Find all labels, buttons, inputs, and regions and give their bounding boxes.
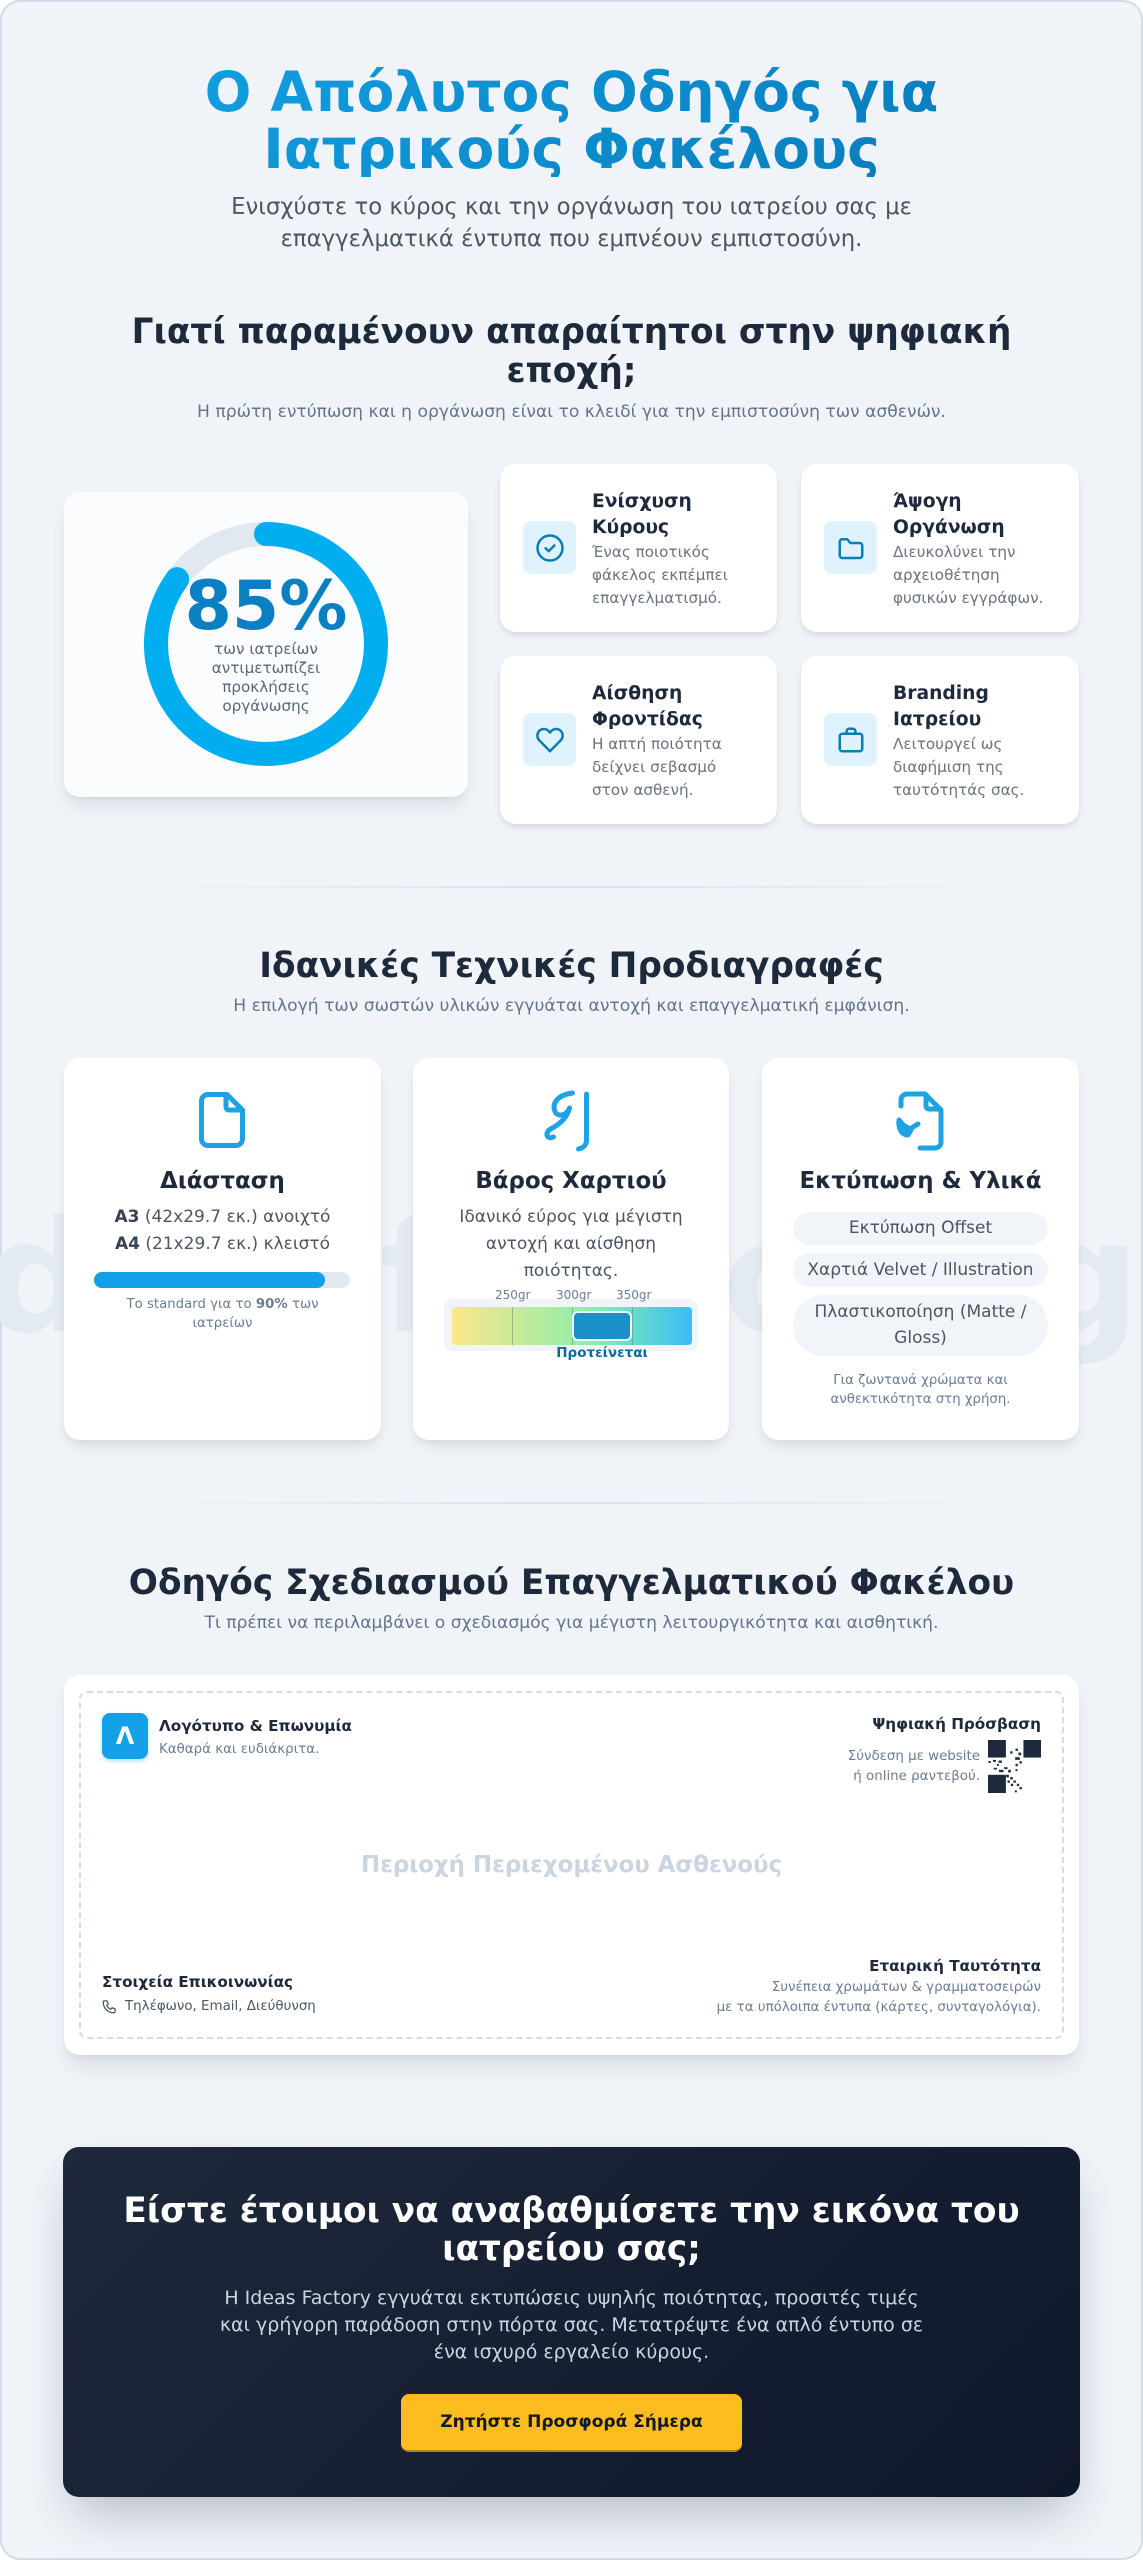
donut caption: οργάνωσης [222, 697, 310, 715]
digital access text [848, 1749, 980, 1784]
title: Ιατρικούς Φακέλους [263, 116, 880, 180]
panel: 85% statistic [64, 492, 468, 797]
card text [893, 683, 1024, 799]
heading: folder design guide: Οδηγός Σχεδιασμού Επαγγελματικού Φακέλου [129, 1563, 1014, 1603]
donut caption: προκλήσεις [222, 678, 310, 696]
card note: ανθεκτικότητα στη χρήση. [830, 1392, 1010, 1407]
panel: dimensions [64, 1058, 381, 1440]
contact info text: Τηλέφωνο, Email, Διεύθυνση [125, 1999, 316, 2014]
card text: Η απτή ποιότητα [592, 735, 722, 753]
card text: Ένας ποιοτικός [592, 543, 710, 561]
card: feeling of care [500, 656, 777, 824]
scale labels: 250gr [495, 1288, 530, 1302]
card text: Λειτουργεί ως [893, 735, 1002, 753]
bar caption: Το standard για το 90% των [126, 1297, 319, 1312]
recommended range [572, 1311, 632, 1341]
donut chart: 85% [144, 522, 388, 766]
scale labels: 350gr [616, 1288, 651, 1302]
contact info heading: Στοιχεία Επικοινωνίας [102, 1973, 293, 1991]
pill: paper [793, 1253, 1048, 1287]
card text: Άψογη [893, 491, 962, 512]
scale labels [495, 1288, 652, 1302]
dashed folder outline [79, 1691, 1064, 2039]
card description: αντοχή και αίσθηση [486, 1234, 656, 1254]
card: flawless organization [801, 464, 1079, 632]
card text: αρχειοθέτηση [893, 566, 1000, 584]
CTA button: Ζητήστε Προσφορά Σήμερα [440, 2412, 703, 2432]
heading: why they remain essential: εποχή; [506, 351, 637, 391]
card text: Ενίσχυση [592, 491, 692, 512]
card text: φάκελος εκπέμπει [592, 566, 728, 584]
scale track [444, 1299, 698, 1351]
card text [592, 491, 728, 607]
weight scale [444, 1288, 698, 1361]
panel: printing and materials [762, 1058, 1079, 1440]
panel: folder layout diagram [64, 1675, 1079, 2055]
section 2 subheading: Η επιλογή των σωστών υλικών εγγυάται αντοχή και επαγγελματική εμφάνιση. [233, 996, 910, 1016]
card text: επαγγελματισμό. [592, 589, 722, 607]
corporate identity heading: Εταιρική Ταυτότητα [869, 1957, 1041, 1975]
card description: Ιδανικό εύρος για μέγιστη [459, 1207, 683, 1227]
subtitle: επαγγελματικά έντυπα που εμπνέουν εμπιστοσύνη. [281, 226, 862, 252]
digital access text: Σύνδεση με website [848, 1749, 980, 1764]
CTA text: και γρήγορη παράδοση στην πόρτα σας. Μετατρέψτε ένα απλό έντυπο σε [220, 2314, 923, 2336]
donut caption [212, 640, 320, 715]
card text: Οργάνωση [893, 517, 1005, 538]
card description: ποιότητας. [524, 1261, 618, 1281]
card text: Branding [893, 683, 989, 704]
card: clinic branding [801, 656, 1079, 824]
CTA heading: Είστε έτοιμοι να αναβαθμίσετε την εικόνα του [123, 2191, 1020, 2231]
section 1 subheading: Η πρώτη εντύπωση και η οργάνωση είναι το κλειδί για την εμπιστοσύνη των ασθενών. [197, 402, 946, 422]
card text: διαφήμιση της [893, 758, 1004, 776]
title [64, 64, 1079, 177]
heading: why they remain essential: Γιατί παραμένουν απαραίτητοι στην ψηφιακή [132, 312, 1011, 352]
background watermark letters: g [1029, 1187, 1140, 1368]
card: enhancing prestige [500, 464, 777, 632]
progress bar 90% [94, 1272, 350, 1288]
corporate identity text [717, 1980, 1041, 2014]
corporate identity text: Συνέπεια χρωμάτων & γραμματοσειρών [772, 1980, 1041, 1995]
donut caption: των ιατρείων [214, 640, 318, 658]
CTA text [220, 2287, 923, 2363]
background watermark letters: f [380, 1187, 447, 1368]
card description [459, 1207, 683, 1281]
logo badge [102, 1713, 148, 1759]
center placeholder: Περιοχή Περιεχομένου Ασθενούς [361, 1852, 782, 1878]
pill: offset [793, 1212, 1048, 1245]
pill: offset: Εκτύπωση Offset [849, 1218, 992, 1238]
title: Ο Απόλυτος Οδηγός για [205, 60, 938, 124]
QR code [988, 1740, 1041, 1793]
bar caption: ιατρείων [193, 1316, 252, 1331]
logo badge: Λ [116, 1722, 134, 1750]
section 3 subheading: Τι πρέπει να περιλαμβάνει ο σχεδιασμός για μέγιστη λειτουργικότητα και αισθητική. [204, 1613, 938, 1633]
subtitle: Ενισχύστε το κύρος και την οργάνωση του ιατρείου σας με [231, 194, 912, 220]
pill: lamination: Πλαστικοποίηση (Matte / [814, 1302, 1026, 1322]
card text: ταυτότητάς σας. [893, 781, 1024, 799]
gradient bar [452, 1307, 692, 1345]
icon: phone [102, 2000, 116, 2014]
card title: Εκτύπωση & Υλικά [800, 1168, 1041, 1194]
digital access heading: Ψηφιακή Πρόσβαση [872, 1715, 1041, 1733]
icon: file check [896, 1092, 944, 1150]
heading: ideal technical specifications: Ιδανικές Τεχνικές Προδιαγραφές [259, 946, 884, 986]
CTA text: Η Ideas Factory εγγυάται εκτυπώσεις υψηλής ποιότητας, προσιτές τιμές [224, 2287, 919, 2309]
background watermark letters: o [722, 1187, 828, 1368]
card text: Φροντίδας [592, 709, 703, 730]
card text: Αίσθηση [592, 683, 682, 704]
card text: δείχνει σεβασμό [592, 758, 716, 776]
card text: Διευκολύνει την [893, 543, 1015, 561]
icon: check circle [523, 521, 576, 574]
bar caption [126, 1297, 319, 1331]
pill: paper: Χαρτιά Velvet / Illustration [807, 1260, 1034, 1280]
card text [592, 683, 722, 799]
CTA heading [123, 2191, 1020, 2269]
card text: στον ασθενή. [592, 781, 693, 799]
panel: paper weight [413, 1058, 729, 1440]
CTA text: ένα ισχυρό εργαλείο κύρους. [434, 2341, 709, 2363]
card note [830, 1373, 1010, 1407]
CTA heading: ιατρείου σας; [442, 2229, 701, 2269]
logo text: Λογότυπο & Επωνυμία [159, 1717, 352, 1735]
logo text [159, 1717, 352, 1757]
corporate identity text: με τα υπόλοιπα έντυπα (κάρτες, συνταγολόγια). [717, 2000, 1041, 2014]
big number 85%: 85% [185, 567, 347, 646]
pill: lamination: Gloss) [894, 1328, 947, 1348]
panel: call to action [63, 2147, 1080, 2497]
size lines: A3 (42x29.7 εκ.) ανοιχτό [115, 1207, 330, 1227]
size lines [114, 1207, 330, 1254]
card note: Για ζωντανά χρώματα και [833, 1373, 1008, 1388]
icon: briefcase [824, 713, 877, 766]
card text: Ιατρείου [893, 709, 981, 730]
digital access text: ή online ραντεβού. [853, 1768, 980, 1784]
logo text: Καθαρά και ευδιάκριτα. [159, 1742, 319, 1757]
icon: scale glyph [544, 1090, 589, 1152]
card title: Βάρος Χαρτιού [475, 1168, 667, 1194]
card text: Κύρους [592, 517, 669, 538]
icon: document [199, 1092, 245, 1148]
subtitle [231, 194, 912, 252]
heading: why they remain essential [132, 312, 1011, 391]
icon: heart [523, 713, 576, 766]
size lines: A4 (21x29.7 εκ.) κλειστό [115, 1234, 330, 1254]
icon: folder [824, 521, 877, 574]
CTA button [401, 2394, 742, 2452]
background watermark letters [0, 1187, 1140, 1368]
recommended label: Προτείνεται [556, 1345, 648, 1361]
donut caption: αντιμετωπίζει [212, 659, 320, 677]
scale labels: 300gr [556, 1288, 591, 1302]
card text [893, 491, 1043, 607]
card title: Διάσταση [160, 1168, 285, 1194]
card text: φυσικών εγγράφων. [893, 589, 1043, 607]
pill: lamination [793, 1295, 1048, 1356]
